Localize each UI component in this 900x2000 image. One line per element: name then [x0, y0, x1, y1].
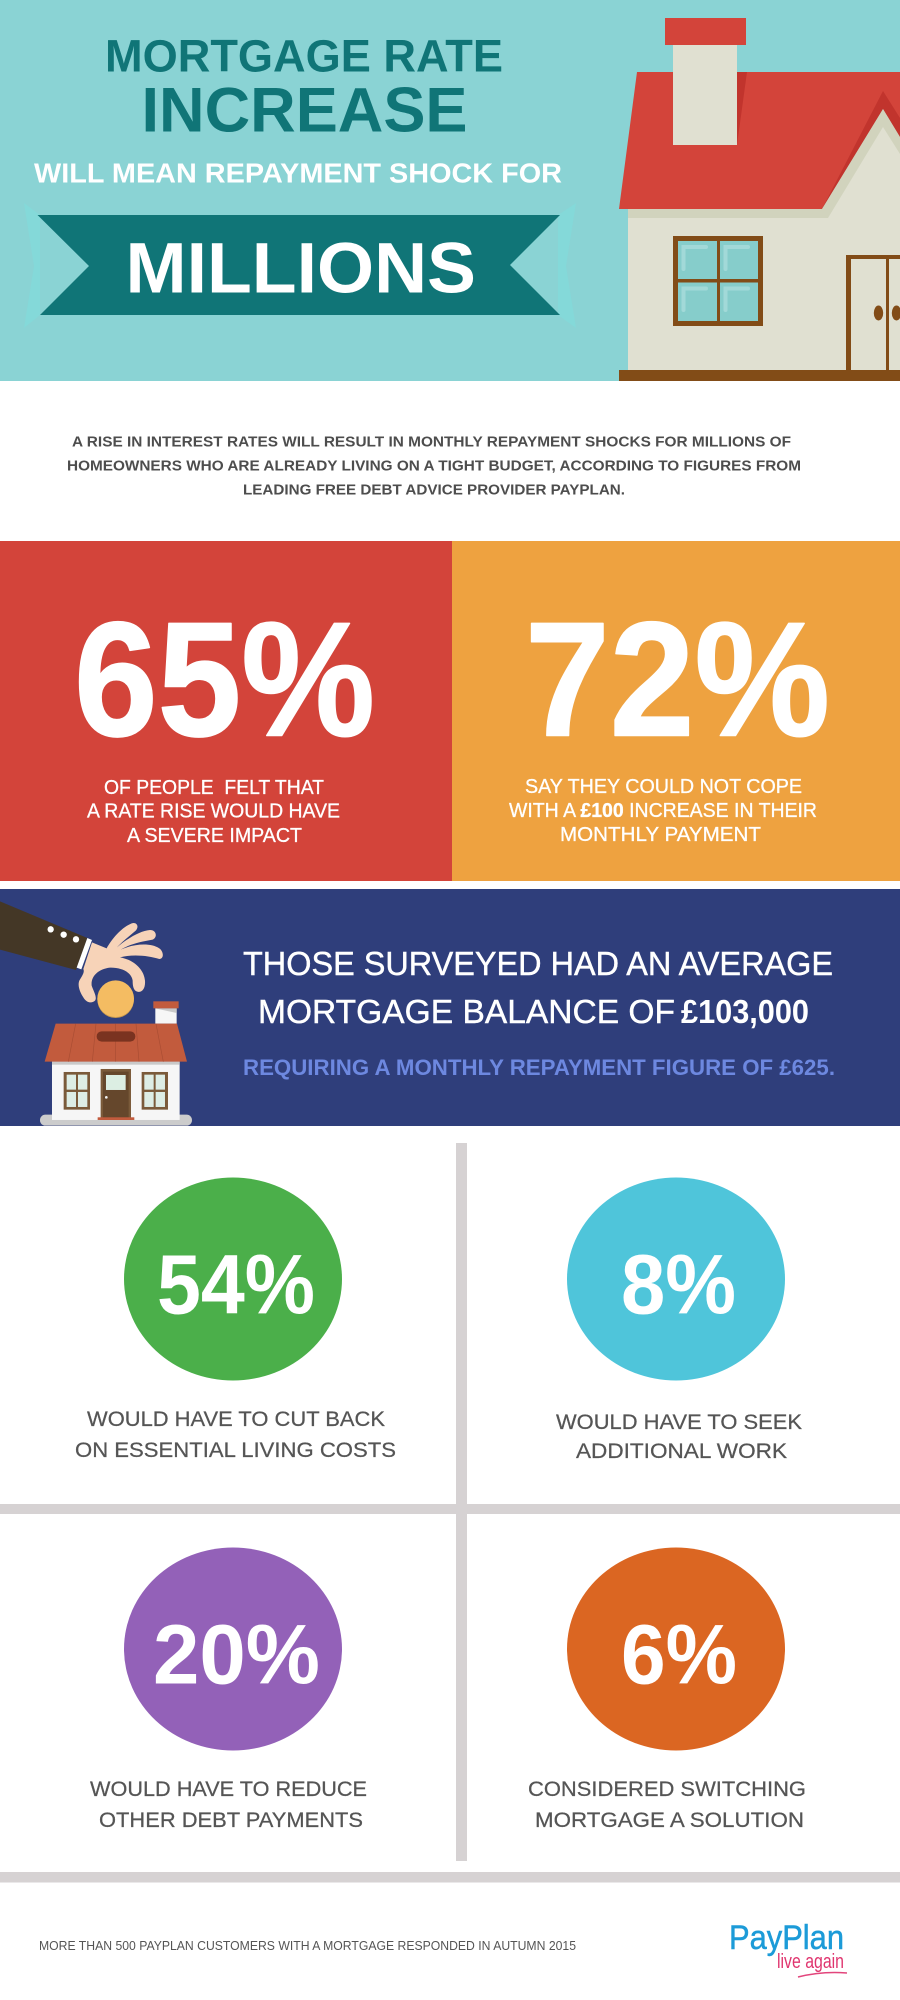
panel: header: [0, 0, 900, 381]
caption: CONSIDERED SWITCHING: [528, 1777, 806, 1801]
caption: OF PEOPLE FELT THAT: [104, 776, 324, 799]
caption: A RATE RISE WOULD HAVE: [87, 800, 340, 822]
intro text: LEADING FREE DEBT ADVICE PROVIDER PAYPLAN.: [243, 482, 625, 498]
icon: hand dropping coin: [0, 901, 163, 1018]
caption: A SEVERE IMPACT: [127, 824, 302, 847]
caption: SAY THEY COULD NOT COPE: [525, 775, 802, 798]
caption: ADDITIONAL WORK: [576, 1439, 788, 1463]
footer source note: MORE THAN 500 PAYPLAN CUSTOMERS WITH A MORTGAGE RESPONDED IN AUTUMN 2015: [39, 1939, 576, 1953]
caption: ON ESSENTIAL LIVING COSTS: [75, 1438, 396, 1462]
stat: 20 percent: 20%: [153, 1608, 320, 1702]
icon: house: [619, 18, 900, 381]
heading: average balance: MORTGAGE BALANCE OF: [258, 993, 675, 1030]
stat: 54 percent: 54%: [157, 1238, 315, 1332]
banner: millions: [24, 203, 576, 328]
intro text: [67, 434, 801, 498]
stat: 8 percent: 8%: [621, 1238, 736, 1332]
subtitle: WILL MEAN REPAYMENT SHOCK FOR: [34, 158, 562, 188]
stat: 6 percent: [528, 1548, 806, 1832]
caption: MORTGAGE A SOLUTION: [535, 1808, 804, 1832]
caption: WOULD HAVE TO CUT BACK: [87, 1407, 386, 1431]
title: mortgage rate: MORTGAGE RATE: [105, 30, 503, 82]
stat: 65%: 65%: [74, 588, 375, 770]
intro text: A RISE IN INTEREST RATES WILL RESULT IN MONTHLY REPAYMENT SHOCKS FOR MILLIONS OF: [72, 434, 791, 450]
subheading: monthly repayment: REQUIRING A MONTHLY REPAYMENT FIGURE OF £625.: [243, 1055, 835, 1080]
caption: [528, 1777, 806, 1832]
door: [846, 255, 900, 371]
caption: OTHER DEBT PAYMENTS: [99, 1808, 363, 1832]
stat: 6 percent: 6%: [621, 1608, 737, 1702]
logo: PayPlan: live again: [777, 1951, 844, 1973]
caption: [90, 1777, 367, 1832]
intro text: HOMEOWNERS WHO ARE ALREADY LIVING ON A TIGHT BUDGET, ACCORDING TO FIGURES FROM: [67, 458, 801, 474]
stat: 20 percent: [90, 1548, 367, 1832]
panel: 72 percent: [452, 541, 900, 881]
heading: average balance: THOSE SURVEYED HAD AN AVERAGE: [243, 945, 833, 982]
caption: [556, 1410, 803, 1463]
caption: [75, 1407, 396, 1462]
stat: 54 percent: [75, 1178, 396, 1462]
title: increase: INCREASE: [142, 76, 468, 146]
caption: WOULD HAVE TO REDUCE: [90, 1777, 367, 1801]
heading: average balance: [243, 945, 833, 1030]
caption: MONTHLY PAYMENT: [560, 823, 761, 846]
header background: [0, 0, 900, 381]
stat: 72%: 72%: [525, 588, 830, 770]
panel: 65 percent: [0, 541, 452, 881]
heading: average balance: £103,000: [681, 993, 809, 1030]
logo: PayPlan: PayPlan: [729, 1919, 844, 1957]
caption: WOULD HAVE TO SEEK: [556, 1410, 803, 1434]
panel: mortgage balance: [0, 889, 900, 1126]
stat: 8 percent: [556, 1178, 803, 1463]
caption: [509, 775, 817, 846]
icon: piggy bank house: [40, 1001, 192, 1126]
logo: PayPlan: [729, 1919, 847, 1977]
banner: millions: MILLIONS: [126, 230, 476, 308]
caption: [87, 776, 340, 847]
window: [673, 236, 763, 326]
caption: WITH A £100 INCREASE IN THEIR: [509, 799, 817, 822]
